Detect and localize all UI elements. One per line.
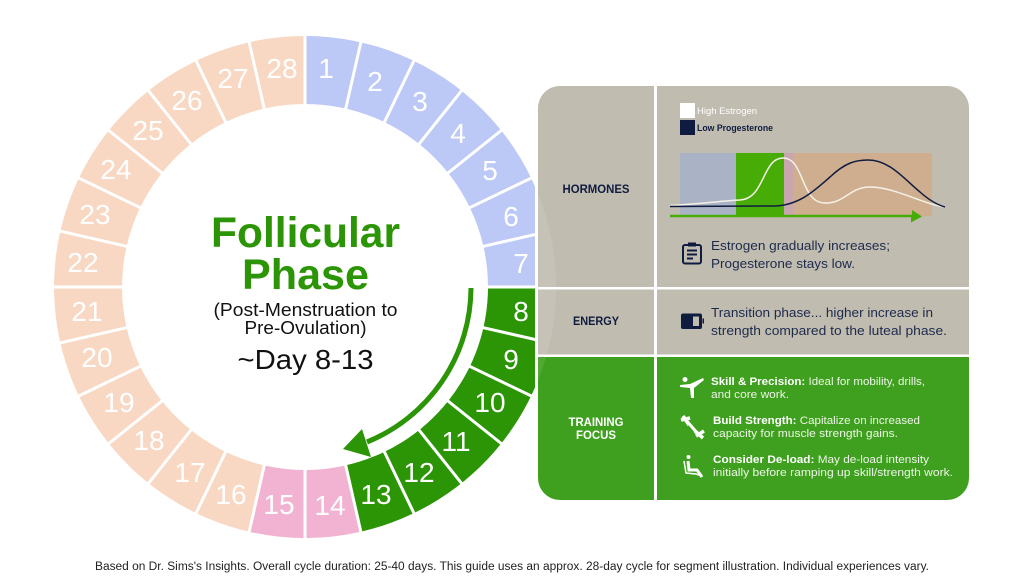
icon: seated figure [684, 455, 702, 477]
icon: clipboard [683, 242, 701, 264]
chart legend: Low Progesterone [697, 123, 773, 133]
skill and precision text: Skill & Precision: Ideal for mobility, drills, [711, 376, 925, 388]
day numbers [67, 53, 529, 521]
day numbers: 21 [71, 296, 103, 327]
day numbers: 14 [314, 490, 346, 521]
subtitle: Pre-Ovulation) [244, 318, 366, 338]
row labels: HORMONES [562, 184, 630, 196]
build strength text [713, 415, 920, 440]
row labels: FOCUS [576, 430, 616, 442]
day numbers: 9 [503, 344, 519, 375]
hormones note: Estrogen gradually increases; [711, 238, 890, 253]
day numbers: 7 [513, 248, 529, 279]
energy note: strength compared to the luteal phase. [711, 323, 947, 338]
build strength text: Build Strength: Capitalize on increased [713, 415, 920, 427]
day range: ~Day 8-13 [238, 344, 374, 375]
hormones note: Progesterone stays low. [711, 256, 855, 271]
day numbers: 26 [171, 85, 203, 116]
heading: Phase [242, 251, 369, 299]
segment dividers [48, 30, 562, 544]
chart legend [680, 103, 773, 135]
ring segments: days 8-13 follicular [346, 287, 556, 532]
direction arrow [343, 288, 471, 457]
day numbers: 2 [367, 66, 383, 97]
cycle ring [48, 30, 562, 544]
icon: kicking figure [680, 377, 704, 398]
day numbers: 1 [318, 53, 334, 84]
day numbers: 18 [133, 425, 165, 456]
day numbers: 12 [403, 457, 435, 488]
row labels: ENERGY [573, 316, 619, 328]
subtitle [214, 300, 398, 338]
day numbers: 4 [450, 118, 466, 149]
day numbers: 3 [412, 86, 428, 117]
consider de-load text [713, 454, 953, 479]
skill and precision text: and core work. [711, 389, 789, 401]
day numbers: 19 [103, 387, 135, 418]
day numbers: 23 [79, 199, 111, 230]
row labels: TRAINING [568, 417, 624, 429]
chart legend: High Estrogen [697, 106, 757, 116]
icon: barbell [681, 416, 704, 438]
day numbers: 25 [132, 115, 164, 146]
hormone chart [670, 153, 945, 222]
info panel [535, 86, 969, 500]
day numbers: 8 [513, 296, 529, 327]
row labels [562, 184, 630, 442]
ring segments: days 14-15 ovulation [249, 465, 361, 538]
consider de-load text: initially before ramping up skill/strength work. [713, 467, 953, 479]
day numbers: 17 [174, 457, 206, 488]
day numbers: 5 [482, 155, 498, 186]
icon: battery [681, 314, 704, 329]
energy note: Transition phase... higher increase in [711, 305, 933, 320]
heading: Follicular [211, 209, 400, 257]
day numbers: 16 [215, 479, 247, 510]
skill and precision text [711, 376, 925, 401]
phase title [211, 209, 400, 375]
heading [211, 209, 400, 299]
ring segments: days 16-28 luteal [54, 36, 305, 532]
build strength text: capacity for muscle strength gains. [713, 428, 898, 440]
day numbers: 27 [217, 63, 249, 94]
day numbers: 13 [360, 479, 392, 510]
day numbers: 6 [503, 201, 519, 232]
subtitle: (Post-Menstruation to [214, 300, 398, 320]
day numbers: 20 [81, 342, 113, 373]
day numbers: 22 [67, 247, 99, 278]
day numbers: 10 [474, 387, 506, 418]
day numbers: 24 [100, 154, 132, 185]
hormones note [711, 238, 890, 271]
day numbers: 15 [263, 489, 295, 520]
footer note: Based on Dr. Sims's Insights. Overall cycle duration: 25-40 days. This guide uses an approx. 28-day cycle for segment illustration. Individual experiences vary. [95, 561, 929, 573]
consider de-load text: Consider De-load: May de-load intensity [713, 454, 930, 466]
day numbers: 11 [441, 426, 471, 457]
energy note [711, 305, 947, 338]
day numbers: 28 [266, 53, 298, 84]
ring segments: days 1-7 menstruation [305, 36, 556, 287]
